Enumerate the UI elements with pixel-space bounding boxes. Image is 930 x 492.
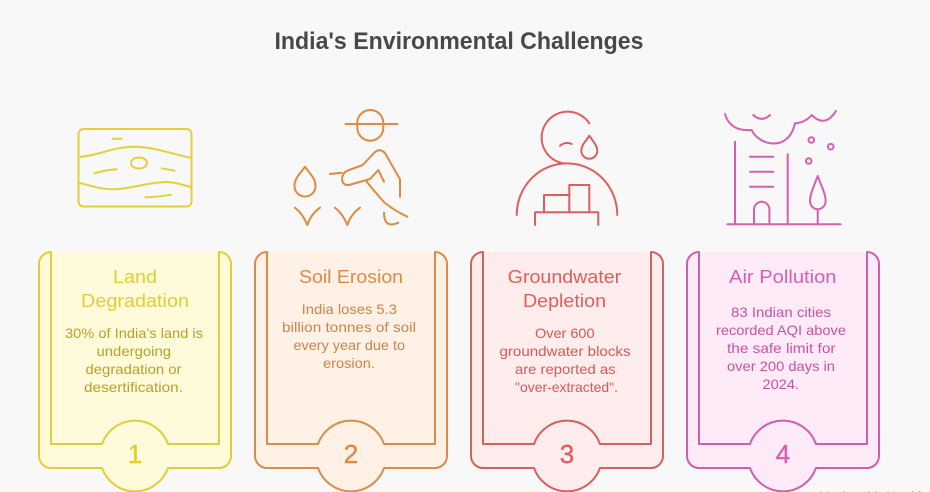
card frame [687,252,879,491]
card outline [255,252,447,491]
heading: Degradation [81,291,189,311]
description: India loses 5.3 [302,301,397,317]
description: undergoing [96,343,171,359]
panel: air pollution [687,252,879,491]
number 3: 3 [560,439,574,469]
description [500,325,630,395]
icon: land landscape [78,129,192,206]
heading: Groundwater [508,267,621,287]
description: every year due to [294,337,405,353]
description: 83 Indian cities [731,304,831,320]
description: "over-extracted". [515,379,618,395]
description: Over 600 [535,325,595,341]
heading: Land [113,267,157,287]
icon: polluted city [725,111,840,224]
heading: Depletion [523,291,606,311]
number 2: 2 [344,439,358,469]
description: 30% of India's land is [65,325,203,341]
icon: farmer on eroded soil [294,110,407,225]
description: degradation or [86,361,182,377]
card frame [255,252,447,491]
title: India's Environmental Challenges [274,28,644,55]
icon: sad person with water drop and blocks [517,112,617,225]
heading [508,267,621,311]
description: recorded AQI above [716,322,846,338]
panel: soil erosion [255,252,447,491]
card outline [687,252,879,491]
panel: groundwater depletion [471,252,663,491]
description [716,304,846,392]
description: the safe limit for [727,340,836,356]
description: erosion. [323,355,375,371]
description [65,325,203,395]
card frame [39,252,231,491]
heading [81,267,189,311]
description: over 200 days in [727,358,835,374]
description: billion tonnes of soil [282,319,416,335]
card outline [39,252,231,491]
panel: land degradation [39,252,231,491]
description: groundwater blocks [500,343,630,359]
heading: Air Pollution [729,267,836,287]
heading: Soil Erosion [299,267,403,287]
card outline [471,252,663,491]
card frame [471,252,663,491]
description: 2024. [762,376,799,392]
number 1: 1 [128,439,142,469]
description: desertification. [84,379,183,395]
number 4: 4 [776,439,790,469]
description: are reported as [515,361,616,377]
description [282,301,416,371]
